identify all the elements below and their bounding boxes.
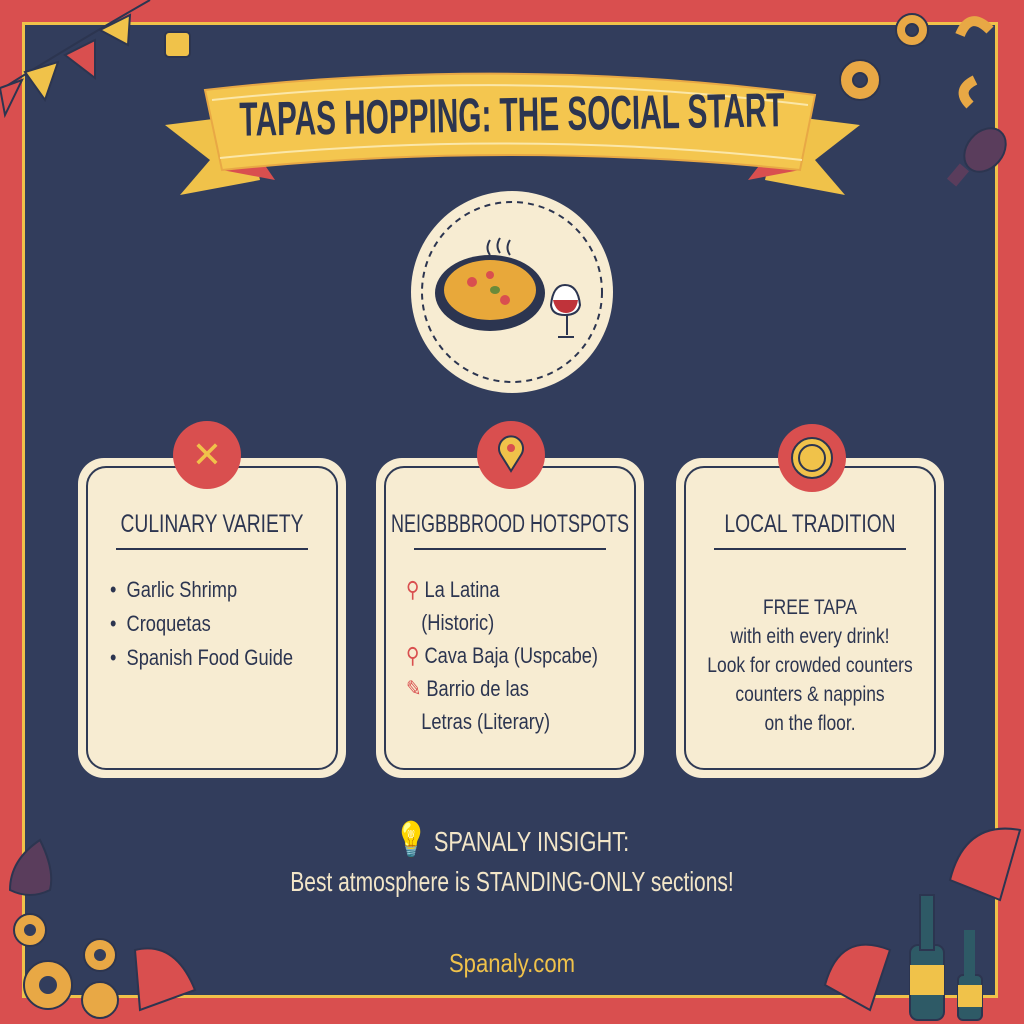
icon: fork spoon: ✕ xyxy=(192,434,222,475)
card: culinary variety: • Spanish Food Guide xyxy=(110,645,293,670)
icon: fork spoon xyxy=(173,421,241,489)
card: neighborhood hotspots: ⚲ La Latina xyxy=(406,577,500,602)
title ribbon xyxy=(165,74,860,195)
title: TAPAS HOPPING: THE SOCIAL START xyxy=(239,84,785,147)
card: culinary variety: CULINARY VARIETY xyxy=(121,510,303,538)
icon: map pin xyxy=(477,421,545,489)
card: culinary variety xyxy=(78,458,346,778)
card: local tradition: on the floor. xyxy=(764,712,856,735)
card: culinary variety: • Croquetas xyxy=(110,611,211,636)
card: neighborhood hotspots: ⚲ Cava Baja (Uspcabe) xyxy=(406,643,598,668)
card: neighborhood hotspots: ✎ Barrio de las xyxy=(406,676,529,701)
card: neighborhood hotspots xyxy=(376,458,644,778)
bottom right xyxy=(825,829,1020,1020)
card: local tradition: FREE TAPA xyxy=(763,596,857,619)
bunting xyxy=(0,0,190,115)
insight xyxy=(290,820,734,897)
center medallion xyxy=(411,191,613,393)
card: neighborhood hotspots: (Historic) xyxy=(421,610,494,635)
card: local tradition xyxy=(676,458,944,778)
card: neighborhood hotspots: Letras (Literary) xyxy=(421,709,550,734)
card: local tradition: Look for crowded counters xyxy=(707,654,913,677)
card: neighborhood hotspots: NEIGBBBROOD HOTSPOTS xyxy=(391,510,629,538)
donuts top right xyxy=(840,14,990,105)
bottom left xyxy=(10,840,195,1018)
card: culinary variety: • Garlic Shrimp xyxy=(110,577,237,602)
logo: Spanaly.com xyxy=(449,948,575,978)
card: local tradition: counters & nappins xyxy=(735,683,885,706)
bottle top right xyxy=(947,120,1014,187)
insight: Best atmosphere is STANDING-ONLY sections! xyxy=(290,866,734,897)
insight: 💡 SPANALY INSIGHT: xyxy=(395,821,629,859)
icon: plate xyxy=(778,424,846,492)
card: local tradition: with eith every drink! xyxy=(731,625,889,648)
card: local tradition: LOCAL TRADITION xyxy=(724,510,896,538)
